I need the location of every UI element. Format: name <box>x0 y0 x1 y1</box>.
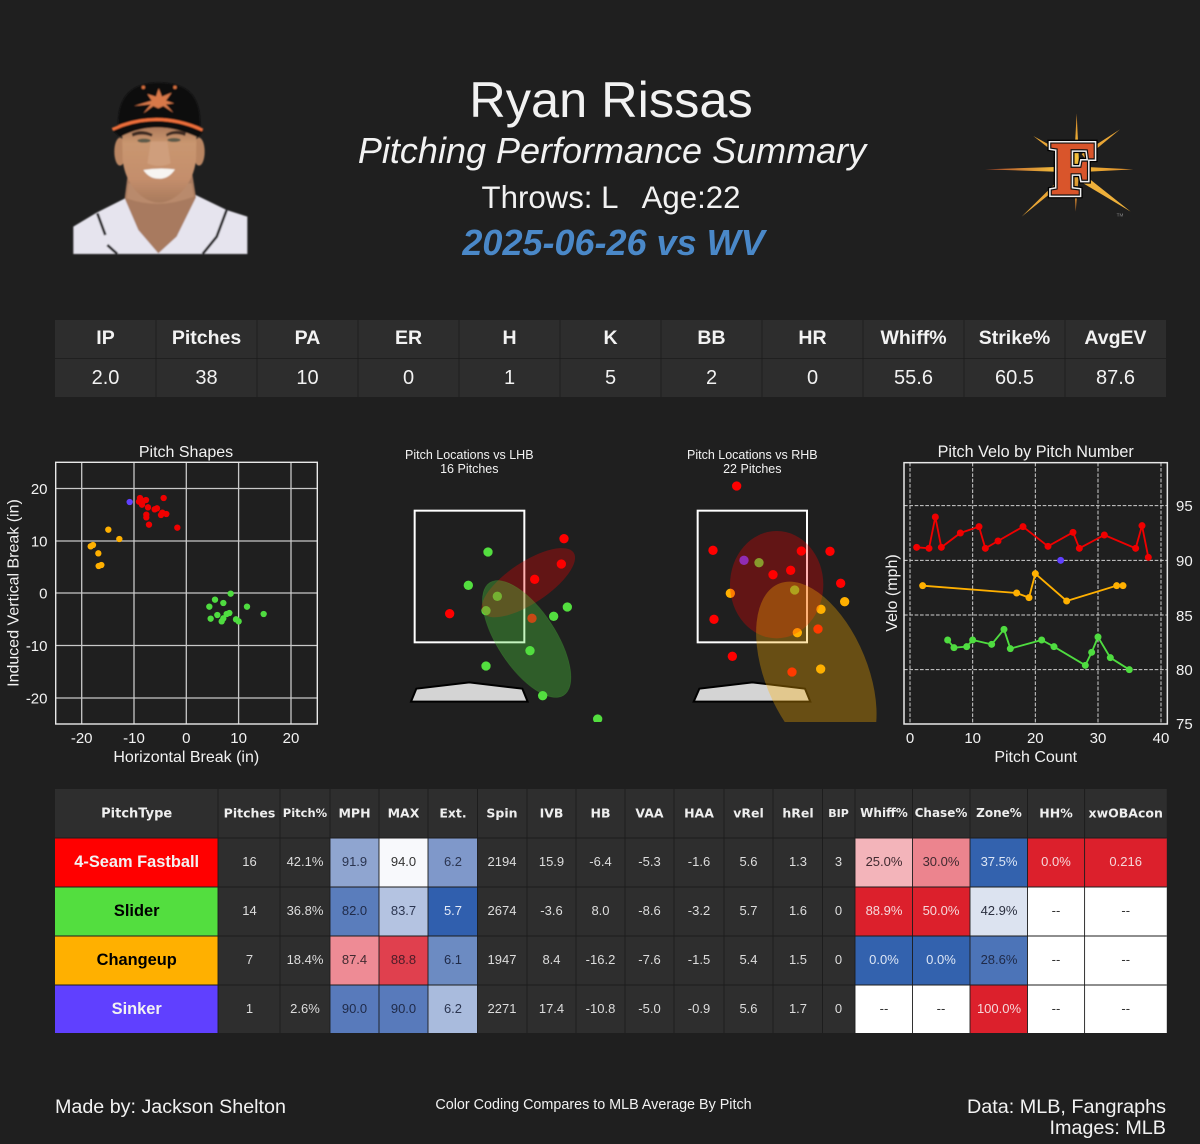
table header row: BIP <box>828 807 849 820</box>
row: slider values: 1.6 <box>789 903 807 918</box>
strike zone <box>698 511 807 642</box>
row: sinker values: 5.6 <box>739 1001 758 1016</box>
row: 4-seam fastball values: 6.2 <box>444 854 462 869</box>
table header row: Zone% <box>976 806 1022 820</box>
table header row: HB <box>590 806 610 820</box>
row: 4-seam fastball values <box>242 854 1142 869</box>
chart: pitch locations vs RHB <box>688 450 876 722</box>
chart: pitch shapes scatter <box>6 444 317 766</box>
panel: pitch metrics table <box>55 789 1167 1033</box>
row: 4-seam fastball values: 42.1% <box>287 854 324 869</box>
row: sinker values: -5.0 <box>638 1001 661 1016</box>
game date and opponent: 2025-06-26 vs WV <box>461 222 768 263</box>
axis tick labels: 0 <box>39 586 48 602</box>
row: slider values <box>242 903 1130 918</box>
velo axis labels: 10 <box>964 730 981 747</box>
row: changeup values: 1947 <box>488 952 516 967</box>
row: slider values: -8.6 <box>638 903 661 918</box>
stats header row: ER <box>395 327 422 349</box>
row: changeup values: -- <box>1052 952 1060 967</box>
row: sinker values: 2271 <box>488 1001 516 1016</box>
slider velo line <box>944 626 1133 673</box>
row: changeup values: 7 <box>246 952 253 967</box>
stats value row: 5 <box>605 367 616 389</box>
stats value row: 1 <box>504 367 515 389</box>
axis tick labels: 0 <box>182 730 190 747</box>
axis tick labels: -10 <box>26 638 48 655</box>
row: sinker values: -0.9 <box>688 1001 710 1016</box>
row: sinker values: -- <box>880 1001 888 1016</box>
row: changeup values: 0.0% <box>926 952 956 967</box>
pitch type names: Sinker <box>112 1000 162 1018</box>
table header row: Spin <box>486 806 518 820</box>
table header row: IVB <box>540 806 563 820</box>
table header row: HAA <box>684 806 714 820</box>
row: changeup values: 6.1 <box>444 952 462 967</box>
row: changeup values: 18.4% <box>287 952 324 967</box>
header: player portrait <box>73 83 247 254</box>
row: 4-seam fastball values: 2194 <box>488 854 516 869</box>
axis tick labels: 10 <box>31 534 48 550</box>
row: slider values: 5.7 <box>444 903 462 918</box>
stats value row: 55.6 <box>894 367 933 389</box>
subtitle: Pitching Performance Summary <box>358 130 868 171</box>
row: sinker values: 1.7 <box>789 1001 807 1016</box>
row: sinker values: -- <box>1052 1001 1060 1016</box>
chart: pitch shapes scatter: Induced Vertical Break (in) <box>6 499 22 687</box>
table header row: PitchType <box>101 806 172 822</box>
icon: team logo: F <box>1051 128 1097 211</box>
pitch type names: Changeup <box>97 951 177 969</box>
row: changeup values: 0 <box>835 952 842 967</box>
footer: data sources <box>967 1096 1166 1139</box>
stats header row: Pitches <box>172 327 241 349</box>
location points <box>445 534 602 724</box>
table header row: xwOBAcon <box>1089 806 1163 820</box>
row: 4-seam fastball values: 15.9 <box>539 854 564 869</box>
row: sinker values <box>246 1001 1130 1016</box>
heat map cells <box>55 789 1167 1033</box>
location points <box>708 481 849 677</box>
pitch type names: 4-Seam Fastball <box>74 853 199 871</box>
row: changeup values: 5.4 <box>739 952 758 967</box>
row: changeup values: 1.5 <box>789 952 807 967</box>
row: slider values: 82.0 <box>342 903 367 918</box>
velo axis labels: 95 <box>1176 498 1193 515</box>
chart: pitch shapes scatter: Horizontal Break (in) <box>113 749 259 766</box>
velo axis labels: 0 <box>906 730 914 747</box>
table header row: VAA <box>635 806 664 820</box>
title: player name: Ryan Rissas <box>469 71 753 128</box>
row: 4-seam fastball values: 37.5% <box>981 854 1018 869</box>
row: sinker values: -10.8 <box>586 1001 615 1016</box>
stats value row: 60.5 <box>995 367 1034 389</box>
row: sinker values: 2.6% <box>290 1001 320 1016</box>
row: sinker values: 1 <box>246 1001 253 1016</box>
row: 4-seam fastball values: 0.0% <box>1041 854 1071 869</box>
row: sinker values: 90.0 <box>391 1001 416 1016</box>
row: slider values: -3.6 <box>540 903 563 918</box>
axis tick labels <box>26 481 299 747</box>
velo axis labels: 30 <box>1090 730 1106 747</box>
row: slider values: 8.0 <box>591 903 610 918</box>
row: slider values: 50.0% <box>923 903 960 918</box>
row: changeup values: 28.6% <box>981 952 1018 967</box>
home plate <box>694 682 810 702</box>
chart: pitch shapes scatter: Pitch Shapes <box>139 444 233 461</box>
row: changeup values: 87.4 <box>342 952 367 967</box>
stats value row: 0 <box>403 367 414 389</box>
axis tick labels: 20 <box>31 481 48 498</box>
row: slider values: 2674 <box>488 903 516 918</box>
velo axis labels: 80 <box>1176 662 1193 679</box>
row: 4-seam fastball values: 3 <box>835 854 842 869</box>
stats header row: IP <box>96 327 115 349</box>
stats header row: HR <box>798 327 827 349</box>
chart: pitch velo by pitch number: Pitch Velo by Pitch Number <box>938 443 1134 461</box>
velo axis labels: 20 <box>1027 730 1044 747</box>
chart: pitch velo by pitch number: Velo (mph) <box>884 554 901 632</box>
row: changeup values: -- <box>1121 952 1130 967</box>
strike zone <box>415 511 524 642</box>
row: slider values: 83.7 <box>391 903 416 918</box>
row: slider values: 0 <box>835 903 842 918</box>
chart: pitch locations vs LHB: Pitch Locations vs LHB <box>405 448 534 462</box>
table header row: Pitches <box>224 806 275 820</box>
chart: pitch locations vs RHB: Pitch Locations vs RHB <box>687 448 818 462</box>
table header row: HH% <box>1039 806 1073 820</box>
pitch type color cells <box>55 838 218 1033</box>
axis tick labels: 20 <box>283 730 299 747</box>
row: 4-seam fastball values: 91.9 <box>342 854 367 869</box>
icon: team logo: F <box>1051 128 1097 211</box>
stats header row: Whiff% <box>880 327 947 349</box>
chart: pitch locations vs LHB <box>405 448 602 724</box>
stats header row: PA <box>295 327 320 349</box>
row: changeup values: 88.8 <box>391 952 416 967</box>
axis tick labels: 10 <box>230 730 247 747</box>
changeup velo line <box>919 570 1126 604</box>
stats header row: BB <box>697 327 726 349</box>
row: 4-seam fastball values: 25.0% <box>866 854 903 869</box>
row: sinker values: -- <box>937 1001 945 1016</box>
stats value row: 0 <box>807 367 818 389</box>
player info: Throws: L Age:22 <box>482 180 740 215</box>
row: changeup values: -16.2 <box>586 952 615 967</box>
icon: team logo: F <box>1051 128 1097 211</box>
density ellipses <box>482 548 575 618</box>
table header row: MPH <box>338 806 371 820</box>
row: slider values: -3.2 <box>688 903 710 918</box>
row: 4-seam fastball values: 94.0 <box>391 854 416 869</box>
stats value row: 87.6 <box>1096 367 1135 389</box>
row: sinker values: 17.4 <box>539 1001 564 1016</box>
stats header row: AvgEV <box>1084 327 1147 349</box>
axis tick labels: -20 <box>71 730 93 747</box>
chart: pitch locations vs RHB: 22 Pitches <box>723 462 781 476</box>
icon: team logo: F <box>1051 128 1097 211</box>
row: slider values: 88.9% <box>866 903 903 918</box>
stats value row: 2.0 <box>92 367 119 389</box>
row: changeup values: 0.0% <box>869 952 899 967</box>
table header row: vRel <box>733 806 764 820</box>
row: 4-seam fastball values: 16 <box>242 854 257 869</box>
row: changeup values: -7.6 <box>638 952 661 967</box>
axis tick labels: -10 <box>123 730 145 747</box>
stats header row: Strike% <box>979 327 1050 349</box>
row: changeup values: 8.4 <box>542 952 561 967</box>
table header row: Whiff% <box>860 806 908 820</box>
chart: pitch locations vs LHB: 16 Pitches <box>440 462 498 476</box>
sinker point <box>1057 557 1064 564</box>
footer: data sources: Data: MLB, Fangraphs <box>967 1096 1166 1118</box>
velo axis labels: 90 <box>1176 553 1193 570</box>
table header row <box>101 806 1163 822</box>
panel: game stats table <box>55 320 1166 397</box>
velo axis labels: 40 <box>1153 730 1169 747</box>
chart: pitch velo by pitch number: Pitch Count <box>994 749 1078 766</box>
home plate <box>411 682 528 702</box>
icon: team logo <box>985 113 1133 218</box>
row: changeup values: -1.5 <box>688 952 710 967</box>
row: slider values: 14 <box>242 903 257 918</box>
row: sinker values: 6.2 <box>444 1001 462 1016</box>
row: sinker values: 0 <box>835 1001 842 1016</box>
row: 4-seam fastball values: 5.6 <box>739 854 758 869</box>
fastball velo line <box>913 513 1152 561</box>
row: slider values: 36.8% <box>287 903 324 918</box>
row: 4-seam fastball values: 30.0% <box>923 854 960 869</box>
row: 4-seam fastball values: 0.216 <box>1109 854 1142 869</box>
stats header row <box>96 327 1147 349</box>
row: 4-seam fastball values: -5.3 <box>638 854 661 869</box>
row: 4-seam fastball values: -1.6 <box>688 854 710 869</box>
table header row: Chase% <box>915 806 967 820</box>
chart: pitch velo by pitch number <box>884 443 1193 766</box>
row: sinker values: 90.0 <box>342 1001 367 1016</box>
velo axis labels <box>906 498 1193 747</box>
pitch type names <box>74 853 199 1018</box>
velo axis labels: 85 <box>1176 608 1193 625</box>
row: sinker values: 100.0% <box>977 1001 1021 1016</box>
stats value row: 10 <box>296 367 319 389</box>
footer: color coding note: Color Coding Compares to MLB Average By Pitch <box>435 1097 752 1113</box>
row: sinker values: -- <box>1121 1001 1130 1016</box>
stats header row: K <box>603 327 618 349</box>
stats value row: 38 <box>195 367 218 389</box>
table header row: MAX <box>388 806 420 820</box>
icon: team logo: TM <box>1117 213 1123 218</box>
velo axis labels: 75 <box>1176 716 1193 733</box>
density ellipses <box>730 531 823 638</box>
scatter points <box>87 495 267 624</box>
row: 4-seam fastball values: -6.4 <box>589 854 612 869</box>
table header row: Ext. <box>439 806 467 820</box>
row: slider values: 42.9% <box>981 903 1018 918</box>
table header row: hRel <box>782 806 814 820</box>
stats value row <box>92 367 1135 389</box>
footer: data sources: Images: MLB <box>1049 1117 1166 1139</box>
pitch type names: Slider <box>114 902 160 920</box>
row: slider values: 5.7 <box>739 903 758 918</box>
table header row: Pitch% <box>283 806 328 820</box>
stats header row: H <box>502 327 517 349</box>
stats value row: 2 <box>706 367 717 389</box>
row: slider values: -- <box>1121 903 1130 918</box>
footer: author credit: Made by: Jackson Shelton <box>55 1096 286 1118</box>
axis tick labels: -20 <box>26 690 48 708</box>
row: changeup values <box>246 952 1130 967</box>
row: slider values: -- <box>1052 903 1060 918</box>
row: 4-seam fastball values: 1.3 <box>789 854 807 869</box>
